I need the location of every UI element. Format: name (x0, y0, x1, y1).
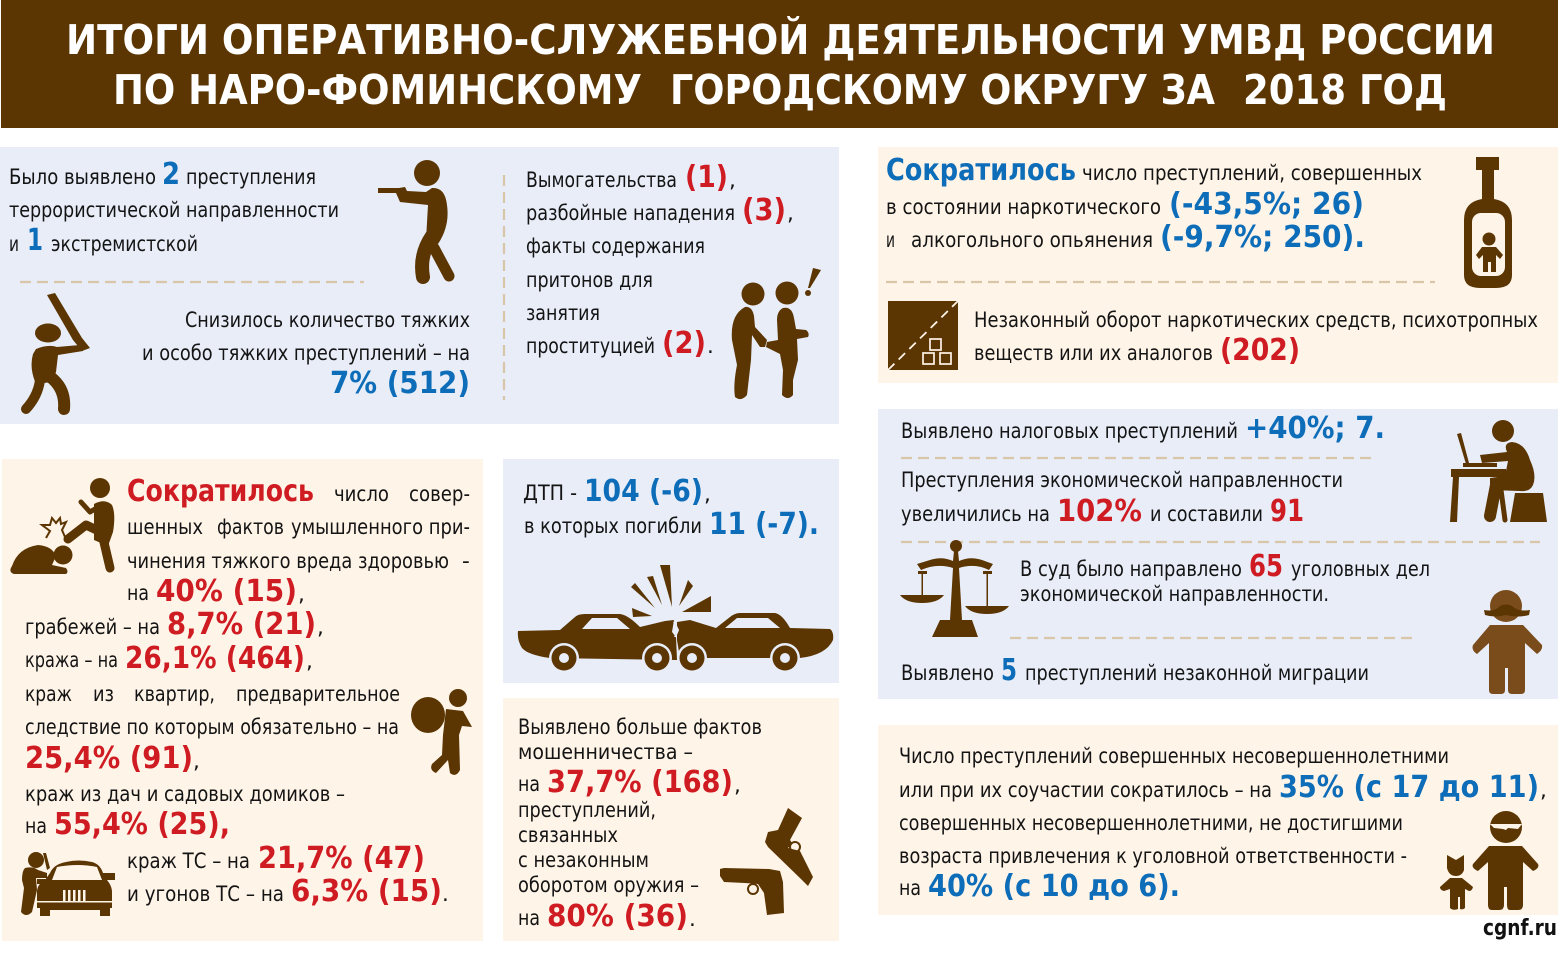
text: fraud and weapons crimes: . (689, 907, 696, 932)
text: juvenile crimes (899, 744, 1547, 904)
text: extortion and robbery: разбойные нападения (526, 201, 735, 226)
text: illegal migration: 5 (1001, 653, 1017, 688)
text: extortion and robbery: факты содержания (526, 234, 705, 259)
text: intoxication crimes: (-9,7%; 250). (1160, 220, 1365, 255)
text: accident counts (523, 474, 819, 542)
text: fraud and weapons crimes: на (518, 906, 540, 931)
text: grave crimes decreased: и особо тяжких преступлений – на (142, 341, 470, 366)
text: intoxication crimes: в состоянии наркотического (886, 195, 1161, 220)
icon: man with moustache (1472, 590, 1542, 694)
panel: fraud and weapons (503, 698, 839, 941)
text: juvenile crimes: возраста привлечения к уголовной ответственности - (899, 844, 1407, 869)
text: extortion and robbery: проституцией (526, 334, 655, 359)
text: terrorism crimes: террористической направленности (9, 198, 339, 223)
text: intoxication crimes: и (886, 228, 895, 253)
text: extortion and robbery: , (729, 168, 736, 193)
panel: decreased crimes (2, 459, 483, 941)
text: tax crimes (901, 411, 1385, 446)
text: fraud and weapons crimes: мошенничества – (518, 740, 693, 765)
text: accident counts: в которых погибли (524, 514, 702, 539)
text: terrorism crimes: и (9, 232, 19, 257)
text: decreased crime list: 26,1% (464) (125, 641, 305, 676)
text: extortion and robbery (526, 160, 794, 361)
text: terrorism crimes: экстремистской (51, 232, 198, 257)
text: juvenile crimes: Число преступлений совершенных несовершеннолетними (899, 744, 1449, 769)
text: economic crimes: 91 (1270, 494, 1304, 529)
text: economic crimes: 102% (1057, 494, 1142, 529)
icon: person at laptop (1450, 420, 1547, 522)
text: illegal drug trafficking: (202) (1220, 333, 1300, 368)
text: fraud and weapons crimes: , (734, 773, 741, 798)
text: decreased crime list: чинения тяжкого вреда здоровью (127, 549, 449, 574)
text: decreased crime list: 21,7% (47) (258, 841, 425, 876)
text: decreased crime list: на (25, 814, 47, 839)
text: decreased crime list: , (306, 649, 313, 674)
text: fraud and weapons crimes: 37,7% (168) (547, 765, 733, 800)
text: decreased crime list: умышленного при- (291, 515, 470, 540)
text: decreased crime list: следствие по которым обязательно – на (25, 715, 399, 740)
text: juvenile crimes: 40% (с 10 до 6). (928, 869, 1180, 904)
text: accident counts: 11 (-7). (709, 507, 819, 542)
text: fraud and weapons crimes: Выявлено больше фактов (518, 715, 762, 740)
panel: tax, economic and migration crimes (878, 409, 1558, 699)
text: decreased crime list: краж ТС – на (127, 849, 250, 874)
text: accident counts: , (704, 482, 711, 507)
text: court cases (1020, 549, 1430, 607)
text: tax crimes: +40%; 7. (1245, 411, 1385, 446)
text: illegal migration: Выявлено (901, 661, 994, 686)
text: fraud and weapons crimes: 80% (36) (547, 899, 688, 934)
icon: thief with sack (411, 689, 472, 775)
text: extortion and robbery: (1) (685, 160, 728, 195)
text: extortion and robbery: притонов для (526, 268, 653, 293)
text: fraud and weapons crimes: оборотом оружия – (518, 873, 699, 898)
icon: bottle with person (1464, 157, 1512, 288)
icon: man kicking a crouching man (10, 478, 114, 574)
text: court cases: экономической направленности. (1020, 582, 1329, 607)
text: decreased crime list: - (462, 549, 470, 574)
text: decreased crime list: грабежей – на (25, 615, 160, 640)
text: terrorism crimes (9, 157, 339, 258)
header banner: ГОРОДСКОМУ ОКРУГУ ЗА (670, 66, 1215, 114)
icon: gunman (378, 160, 449, 277)
text: decreased crime list: Сократилось (127, 474, 314, 509)
text: illegal drug trafficking (974, 308, 1538, 368)
text: decreased crime list (25, 474, 470, 909)
text: extortion and robbery: (3) (742, 193, 786, 228)
text: intoxication crimes (886, 153, 1422, 255)
text: accident counts: 104 (-6) (584, 474, 703, 509)
text: terrorism crimes: преступления (186, 165, 316, 190)
text: decreased crime list: квартир, (134, 682, 215, 707)
text: juvenile crimes: на (899, 876, 921, 901)
text: decreased crime list: 40% (15) (156, 574, 297, 609)
text: economic crimes: и составили (1150, 502, 1263, 527)
text: decreased crime list: фактов (217, 515, 284, 540)
text: juvenile crimes: , (1540, 778, 1547, 803)
text: terrorism crimes: Было выявлено (9, 165, 156, 190)
text: economic crimes (901, 468, 1343, 529)
text: terrorism crimes: 2 (162, 157, 180, 192)
text: fraud and weapons crimes: с незаконным (518, 848, 649, 873)
text: extortion and robbery: занятия (526, 301, 600, 326)
panel: intoxication and drugs (878, 147, 1558, 383)
text: decreased crime list: совер- (409, 482, 470, 507)
text: decreased crime list: , (298, 582, 305, 607)
text: decreased crime list: , (193, 749, 200, 774)
text: court cases: В суд было направлено (1020, 557, 1242, 582)
text: economic crimes: Преступления экономической направленности (901, 468, 1343, 493)
text: illegal drug trafficking: веществ или их аналогов (974, 341, 1213, 366)
icon: masked man and child (1440, 811, 1538, 910)
header banner: 2018 ГОД (1243, 66, 1447, 114)
icon: car crash (518, 565, 833, 673)
text: intoxication crimes: Сократилось (886, 153, 1076, 188)
text: decreased crime list: краж (25, 682, 72, 707)
text: intoxication crimes: алкогольного опьянения (911, 228, 1153, 253)
text: fraud and weapons crimes: связанных (518, 823, 618, 848)
text: fraud and weapons crimes: на (518, 772, 540, 797)
text: decreased crime list: и угонов ТС – на (127, 882, 284, 907)
text: illegal migration (901, 653, 1369, 688)
text: juvenile crimes: совершенных несовершеннолетними, не достигшими (899, 811, 1403, 836)
text: decreased crime list: . (442, 882, 449, 907)
text: decreased crime list: предварительное (236, 682, 400, 707)
text: intoxication crimes: (-43,5%; 26) (1169, 187, 1364, 222)
icon: two people with exclamation mark (732, 268, 821, 399)
text: grave crimes decreased: 7% (512) (330, 366, 470, 401)
icon: two pistols (720, 808, 813, 915)
text: decreased crime list: 55,4% (25), (54, 807, 230, 842)
text: decreased crime list: шенных (127, 515, 203, 540)
header banner (1, 0, 1558, 128)
text: decreased crime list: из (93, 682, 114, 707)
text: court cases: 65 (1249, 549, 1283, 584)
text: decreased crime list: , (317, 615, 324, 640)
text: accident counts: ДТП - (523, 481, 577, 506)
panel: juvenile crimes (878, 725, 1558, 915)
text: decreased crime list: краж из дач и садовых домиков – (25, 782, 345, 807)
panel: road accidents (503, 459, 839, 683)
text: tax crimes: Выявлено налоговых преступлений (901, 419, 1238, 444)
text: intoxication crimes: число преступлений, совершенных (1082, 161, 1422, 186)
header banner: ПО НАРО-ФОМИНСКОМУ (113, 66, 642, 114)
text: economic crimes: увеличились на (901, 502, 1050, 527)
text: decreased crime list: 8,7% (21) (167, 607, 316, 642)
text: extortion and robbery: Вымогательства (526, 168, 677, 193)
icon: scales of justice (900, 540, 1009, 637)
icon: man with bat (26, 293, 90, 409)
panel: terrorism and grave crimes (0, 147, 839, 424)
icon: thief breaking into car (21, 852, 115, 916)
icon: drug packages square (888, 301, 958, 370)
text: decreased crime list: на (127, 581, 149, 606)
text: court cases: уголовных дел (1291, 557, 1430, 582)
text: extortion and robbery: , (787, 201, 794, 226)
text: decreased crime list: 6,3% (15) (291, 874, 442, 909)
text: grave crimes decreased (142, 308, 470, 401)
text: extortion and robbery: . (707, 334, 714, 359)
text: fraud and weapons crimes (518, 715, 762, 934)
text: terrorism crimes: 1 (27, 223, 43, 258)
text: decreased crime list: число (334, 482, 389, 507)
text: extortion and robbery: (2) (662, 326, 706, 361)
text: decreased crime list: кража – на (25, 648, 118, 673)
text: decreased crime list: 25,4% (91) (25, 741, 193, 776)
text: fraud and weapons crimes: преступлений, (518, 798, 656, 823)
text: grave crimes decreased: Снизилось количество тяжких (185, 308, 470, 333)
text: illegal migration: преступлений незаконной миграции (1025, 661, 1369, 686)
text: juvenile crimes: или при их соучастии сократилось – на (899, 778, 1272, 803)
text: juvenile crimes: 35% (с 17 до 11) (1279, 770, 1539, 805)
